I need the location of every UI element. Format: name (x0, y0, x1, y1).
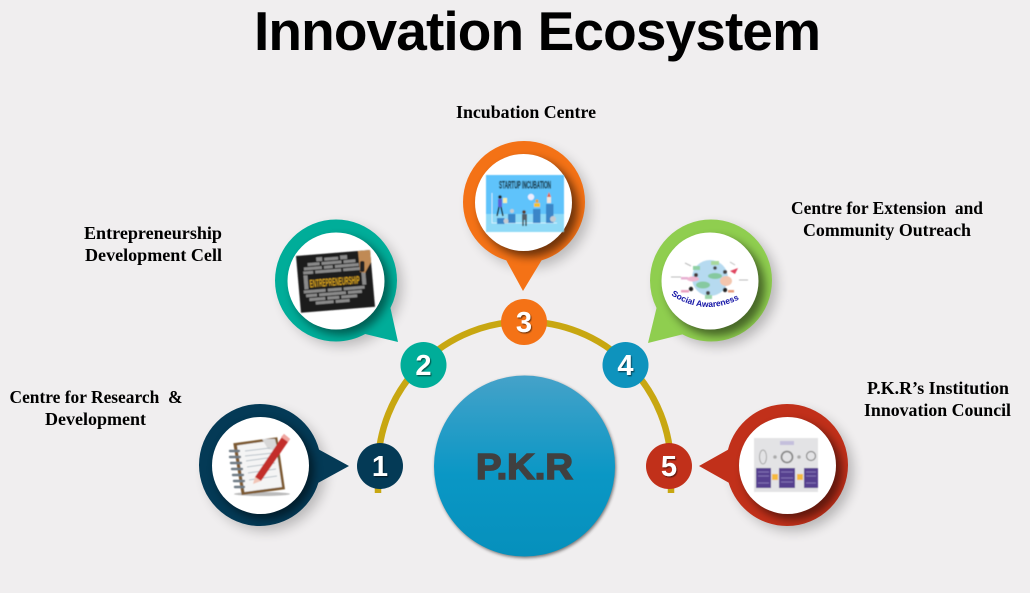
pin 4: community outreach (648, 220, 783, 352)
label: Centre for Extension and Community Outreach: Centre for Extension and (791, 198, 983, 218)
label: Entrepreneurship Development Cell (84, 223, 222, 265)
badge 3: 3 (516, 307, 532, 339)
badge 1: 1 (372, 451, 388, 483)
label: Incubation Centre: Incubation Centre (456, 102, 596, 122)
central hub: P.K.R: P.K.R (476, 446, 573, 487)
badge 4 (602, 342, 648, 388)
central hub: P.K.R (434, 376, 616, 558)
label: P.K.R's Institution Innovation Council (864, 378, 1011, 420)
badge 5: 5 (661, 451, 677, 483)
pin 3: incubation (460, 138, 590, 296)
badge 1 (357, 443, 403, 489)
label: Centre for Extension and Community Outreach (791, 198, 983, 240)
pin 5: innovation council (695, 400, 855, 531)
badge 5 (646, 443, 692, 489)
image: startup incubation: STARTUP INCUBATION (499, 180, 551, 192)
pin 1: research (195, 400, 355, 531)
badge 4: 4 (617, 350, 634, 382)
icon: notebook and pencil (230, 434, 290, 496)
image: startup incubation (486, 175, 564, 232)
label: P.K.R's Institution Innovation Council: Innovation Council (864, 400, 1011, 420)
label: Centre for Research & Development (10, 387, 182, 429)
connecting arc (378, 322, 671, 493)
label: Entrepreneurship Development Cell: Development Cell (85, 245, 222, 265)
image: social awareness globe: Social Awareness (672, 290, 738, 307)
badge 2 (400, 342, 446, 388)
badge 2: 2 (415, 350, 432, 382)
label: Entrepreneurship Development Cell: Entrepreneurship (84, 223, 222, 243)
label: Centre for Extension and Community Outreach: Community Outreach (803, 220, 971, 240)
label: Centre for Research & Development: Centre for Research & (10, 387, 182, 407)
image: entrepreneurship word cloud: ENTREPRENEURSHIP (309, 275, 360, 290)
image: council infographic (754, 438, 818, 492)
badge 3 (501, 299, 547, 345)
pin 2: entrepreneurship (270, 215, 405, 350)
label: P.K.R's Institution Innovation Council: P.K.R’s Institution (867, 378, 1009, 398)
label: Centre for Research & Development: Development (45, 409, 146, 429)
title: Innovation Ecosystem (254, 0, 821, 62)
